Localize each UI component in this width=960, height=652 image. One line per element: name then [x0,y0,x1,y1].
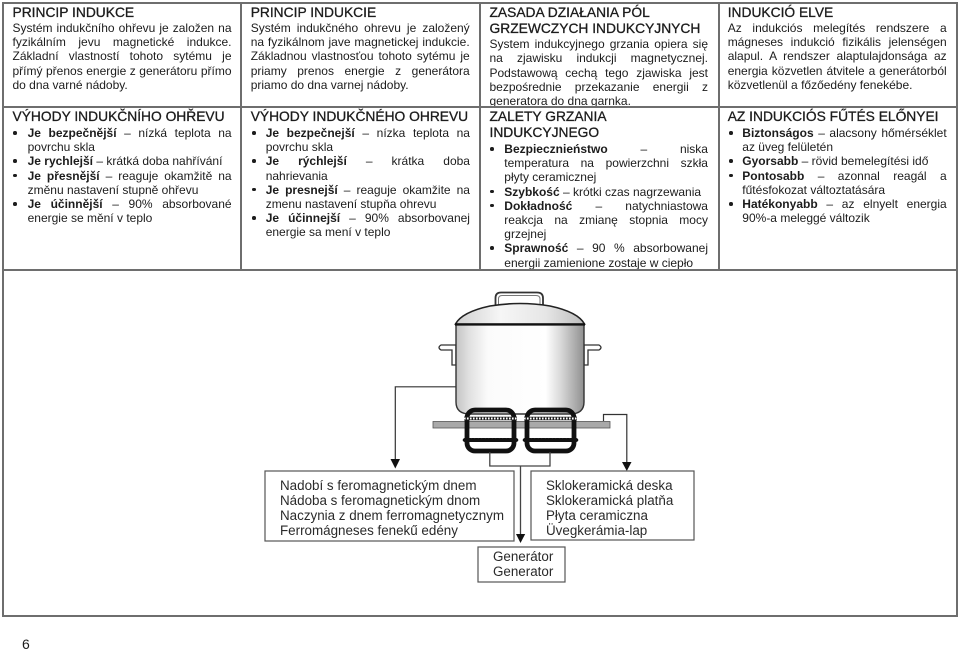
list: Polish advantages: Bezpiecznieństwo – niska [504,142,708,156]
box: cookware label: Naczynia z dnem ferromagnetycznym [280,508,504,523]
heading: Polish principle: GRZEWCZYCH INDUKCYJNYCH [490,21,700,36]
heading: Czech advantages: VÝHODY INDUKČNÍHO OHŘEVU [12,109,225,124]
icon: glass ceramic plate [433,422,610,428]
text block: Polish principle [490,37,708,108]
panel: induction cooking diagram [4,271,956,615]
arrow: coils to generator [490,452,550,543]
list: Polish advantages: Szybkość – krótki czas nagrzewania [504,185,701,199]
list: Hungarian advantages: Hatékonyabb – az elnyelt energia [742,197,947,211]
text block: Hungarian principle: Az indukciós melegítés rendszere a [728,21,947,35]
text block: Czech principle: fyzikálním jevu magnetické indukce. [12,35,232,49]
text block: Hungarian principle [728,21,947,92]
list: Czech advantages: povrchu skla [28,140,95,154]
box: glass ceramic label: Płyta ceramiczna [546,508,649,523]
list: Polish advantages: grzejnej [504,227,546,241]
text block: Polish principle: na zjawisku indukcji magnetycznej. [490,51,708,65]
list: Slovak advantages: Je účinnejší – 90% absorbovanej [266,211,470,225]
list: Czech advantages: Je rychlejší – krátká doba nahřívání [28,154,222,168]
list: Hungarian advantages: Pontosabb – azonnal reagál a [742,169,947,183]
heading: Czech principle: PRINCIP INDUKCE [12,5,134,20]
list: Czech advantages: Je bezpečnější – nízká teplota na [28,126,232,140]
list: Hungarian advantages: az üveg felületén [742,140,833,154]
list: Czech advantages: Je účinnější – 90% absorbované [28,197,232,211]
text block: Czech principle: Základní vlastností tohoto sytému je [12,49,232,63]
list: Slovak advantages: Je bezpečnejší – nízka teplota na [266,126,470,140]
list: Hungarian advantages: Biztonságos – alacsony hőmérséklet [742,126,947,140]
box: generator label: Generátor [493,549,554,564]
box: cookware label: Ferromágneses fenekű edény [280,523,458,538]
box: glass ceramic label: Sklokeramická platňa [546,493,674,508]
box: cookware label: Nádoba s feromagnetickým dnom [280,493,480,508]
heading: Polish advantages [490,109,607,140]
text block: Hungarian principle: energia közvetlen átvitele a generátorból [728,64,947,78]
icon: left induction coil [464,410,517,451]
list: Czech advantages: energie se mění v teplo [28,211,152,225]
list: Slovak advantages: povrchu skla [266,140,333,154]
text block: Czech principle [12,21,232,92]
text block: Hungarian principle: közvetlenül a főzőedény fenekébe. [728,78,912,92]
heading: Slovak advantages: VÝHODY INDUKČNÉHO OHREVU [251,109,468,124]
list: Slovak advantages: zmenu nastavení stupňa ohrevu [266,197,436,211]
text block: Polish principle: bezpośrednie przekazanie energii z [490,80,708,94]
arrow: plate to glass ceramic label [604,414,632,471]
text block: Slovak principle: na fyzikálnom jave magnetickej indukcie. [251,35,470,49]
box: glass ceramic label [531,471,694,540]
list: Hungarian advantages: fűtésfokozat változtatására [742,183,885,197]
list: Slovak advantages [252,126,470,239]
list: Polish advantages: temperatura na powierzchni szkła [504,156,708,170]
text block: Slovak principle: Systém indukčného ohrevu je založený [251,21,470,35]
panel: Hungarian principle [720,4,956,106]
panel: Czech advantages [4,108,240,269]
box: generator label: Generator [493,564,554,579]
text block: Slovak principle [251,21,470,92]
text block: Hungarian principle: mágneses indukció fizikális jelenségen [728,35,947,49]
list: Czech advantages [13,126,232,225]
box: cookware label: Nadobí s feromagnetickým dnem [280,478,476,493]
list: Czech advantages: změnu nastavení stupně ohřevu [28,183,198,197]
list: Polish advantages: energii zamienione zostaje w ciepło [504,256,693,270]
text block: Czech principle: přímý přenos energie z generátoru přímo [12,64,232,78]
heading: Polish principle: ZASADA DZIAŁANIA PÓL [490,5,650,20]
text block: Polish principle: generatora do dna garnka. [490,94,631,108]
heading: Slovak principle: PRINCIP INDUKCIE [251,5,376,20]
text block: Hungarian principle: alapul. A rendszer alaptulajdonsága az [728,49,947,63]
list: Polish advantages [490,142,708,270]
box: glass ceramic label: Üvegkerámia-lap [546,523,647,538]
icon: cooking pot [439,292,601,414]
heading: Polish advantages: ZALETY GRZANIA [490,109,607,124]
text block: Polish principle: System indukcyjnego grzania opiera się [490,37,708,51]
list: Hungarian advantages: 90%-a meleggé változik [742,211,870,225]
panel: Hungarian advantages [720,108,956,269]
list: Polish advantages: reakcja na zmianę stopnia mocy [504,213,708,227]
list: Polish advantages: płyty ceramicznej [504,170,596,184]
text block: Slovak principle: priamy prenos energie z generátora [251,64,470,78]
heading: Polish principle [490,4,700,36]
box: cookware label [265,471,514,541]
arrow: pot to cookware label [390,387,456,468]
heading: Polish advantages: INDUKCYJNEGO [490,125,599,140]
heading: Hungarian principle: INDUKCIÓ ELVE [728,5,833,20]
text block: Polish principle: Podstawową cechą tego zjawiska jest [490,66,708,80]
list: Slovak advantages: Je rýchlejší – krátka doba [266,154,470,168]
list: Polish advantages: Sprawność – 90 % absorbowanej [504,241,708,255]
panel: Slovak principle [242,4,479,106]
icon: right induction coil [524,410,577,451]
text block: Slovak principle: Základnou vlastnosťou tohoto sytému je [251,49,470,63]
box: glass ceramic label: Sklokeramická deska [546,478,673,493]
text block: Slovak principle: priamo do dna varnej nádoby. [251,78,409,92]
list: Hungarian advantages [729,126,947,225]
list: Slovak advantages: energie sa mení v teplo [266,225,390,239]
list: Polish advantages: Dokładność – natychniastowa [504,199,708,213]
panel: Polish principle [481,4,718,106]
page number: 6 [22,636,30,652]
list: Slovak advantages: Je presnejší – reaguje okamžite na [266,183,470,197]
heading: Hungarian advantages: AZ INDUKCIÓS FŰTÉS ELŐNYEI [728,109,939,124]
list: Hungarian advantages: Gyorsabb – rövid bemelegítési idő [742,154,928,168]
list: Slovak advantages: nahrievania [266,169,328,183]
panel: Polish advantages [481,108,718,269]
list: Czech advantages: Je přesnější – reaguje okamžitě na [28,169,232,183]
panel: Slovak advantages [242,108,479,269]
panel: Czech principle [4,4,240,106]
box: generator label [478,547,565,582]
text block: Czech principle: Systém indukčního ohřevu je založen na [12,21,232,35]
text block: Czech principle: do dna varné nádoby. [12,78,128,92]
